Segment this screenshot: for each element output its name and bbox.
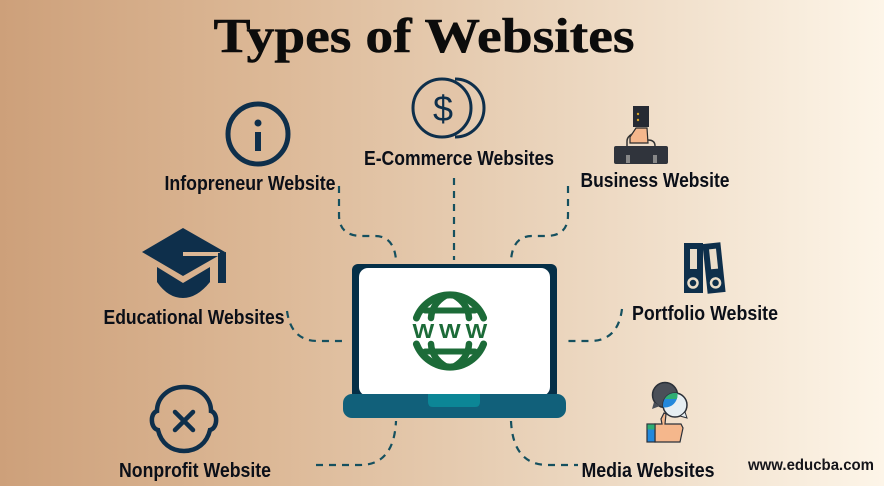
watermark: www.educba.com	[747, 457, 874, 474]
label: nonprofit: Nonprofit Website	[119, 460, 271, 482]
icon: www globe: WWW	[413, 319, 488, 343]
label: business: Business Website	[580, 170, 730, 192]
laptop lid	[352, 264, 557, 399]
label: infopreneur: Infopreneur Website	[164, 173, 336, 195]
connector: media	[511, 421, 578, 465]
connector: portfolio	[565, 309, 622, 341]
icon: briefcase with hand	[614, 106, 668, 164]
icon: head with x	[152, 387, 216, 451]
icon: binders	[684, 242, 726, 294]
laptop base	[343, 394, 566, 418]
title: Types of Websites	[214, 8, 634, 63]
connector: nonprofit	[316, 421, 396, 465]
label: e-commerce: E-Commerce Websites	[364, 148, 554, 170]
icon: dollar coins	[413, 79, 484, 137]
laptop notch	[428, 394, 480, 407]
connector: business	[511, 186, 568, 260]
connector: infopreneur	[339, 186, 396, 260]
label: educational: Educational Websites	[104, 307, 284, 329]
icon: www globe	[413, 295, 488, 367]
laptop screen	[359, 268, 550, 396]
connector: e-commerce	[453, 178, 455, 260]
icon: info circle	[228, 104, 288, 164]
connector: educational	[287, 311, 344, 341]
label: media: Media Websites	[582, 460, 714, 482]
icon: chat bubbles and thumbs up	[647, 382, 687, 442]
laptop	[343, 264, 566, 418]
icon: dollar coins: $	[433, 88, 453, 129]
icon: graduation cap	[142, 228, 226, 298]
label: portfolio: Portfolio Website	[632, 303, 778, 325]
